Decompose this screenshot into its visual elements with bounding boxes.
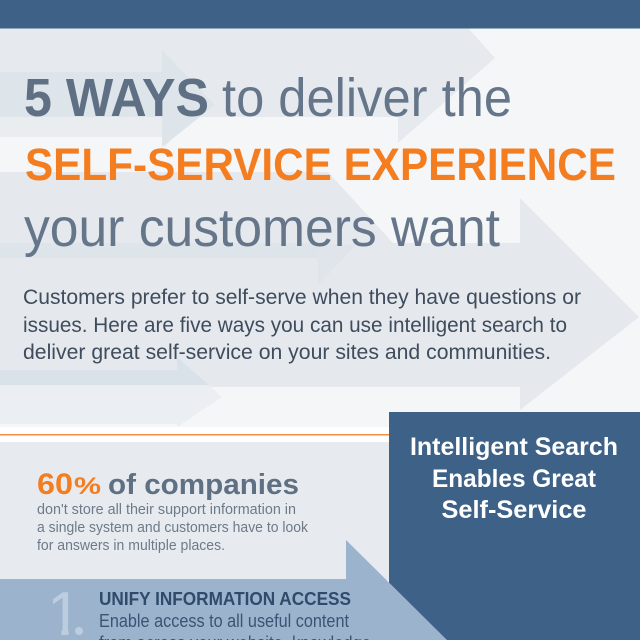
step 1 number (53, 592, 83, 635)
title: SELF-SERVICE EXPERIENCE (25, 139, 616, 190)
step 1 text: Enable access to all useful content (99, 611, 349, 631)
panel heading: Self-Service (442, 496, 587, 524)
panel heading: Enables Great (432, 465, 597, 493)
title: to deliver the (222, 68, 512, 128)
statistic heading: of companies (108, 469, 299, 501)
intro paragraph: deliver great self-service on your sites and communities. (23, 341, 551, 364)
title: your customers want (24, 198, 500, 258)
panel heading (410, 433, 618, 524)
statistic text: for answers in multiple places. (37, 538, 225, 554)
panel: dark blue (389, 412, 640, 640)
statistic heading: 60 (37, 468, 73, 501)
statistic text (37, 502, 309, 554)
statistic heading: % (74, 473, 101, 500)
top bar (0, 0, 640, 28)
panel: 60% of companies (0, 442, 389, 580)
statistic text: don't store all their support information in (37, 502, 296, 518)
step 1 text (99, 589, 371, 640)
statistic heading (37, 468, 299, 501)
statistic text: a single system and customers have to look (37, 520, 309, 536)
intro paragraph (23, 286, 581, 364)
intro paragraph: issues. Here are five ways you can use intelligent search to (23, 314, 567, 337)
step 1 arrow (0, 540, 447, 640)
title: 5 WAYS (24, 68, 209, 128)
panel heading: Intelligent Search (410, 433, 618, 461)
intro paragraph: Customers prefer to self-serve when they have questions or (23, 286, 581, 309)
title (24, 68, 616, 258)
step 1 text: UNIFY INFORMATION ACCESS (99, 589, 351, 609)
orange divider (0, 434, 389, 436)
